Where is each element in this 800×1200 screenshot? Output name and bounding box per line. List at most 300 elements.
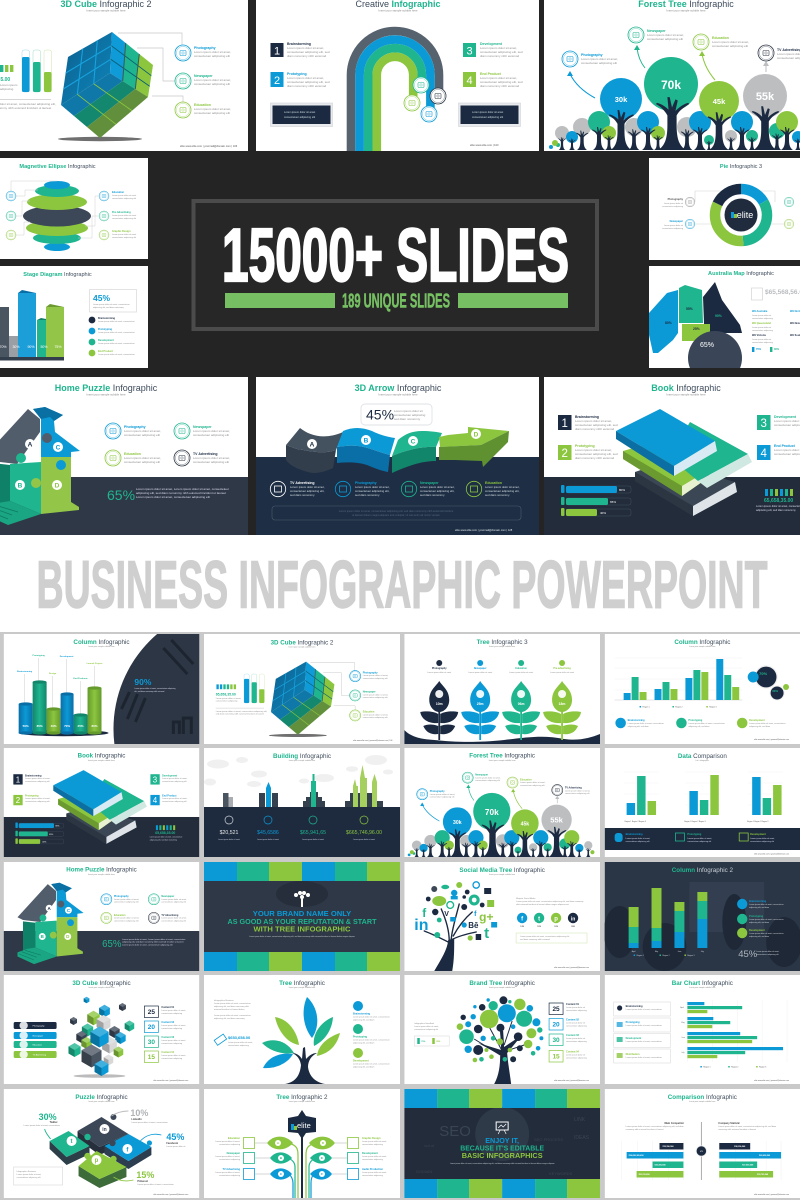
list A-D: Brainstorming (98, 317, 116, 320)
percent boxes: consectetuer adipiscing (566, 1040, 587, 1043)
slide: Forest Tree Infographic (top): Photography (581, 53, 603, 57)
slide: 3D Cube Infographic 2 (top): Newspaper (194, 74, 213, 78)
column chart (624, 659, 739, 700)
share stats: 12M (537, 926, 541, 928)
people figure (150, 825, 183, 841)
headline: ENJOY IT, (485, 1136, 519, 1145)
thumbnail: 3D Cube Infographic: Insert your sample subtitle here (88, 986, 115, 989)
horizontal bars: April (680, 1006, 684, 1009)
slide: Magnetive Ellipse Infographic: consectetuer adipiscing elit (112, 197, 136, 200)
45% box: Lorem ipsum dolor sit amet, consectetuer (93, 303, 130, 306)
thumbnail: 3D Cube Infographic 2: Lorem ipsum dolor sit amet, (363, 693, 389, 696)
slide: Magnetive Ellipse Infographic: Lorem ipsum dolor sit amet (112, 214, 137, 217)
leaves (262, 997, 340, 1068)
cylinder labels: Design (49, 673, 57, 675)
title: Tree Infographic (279, 980, 325, 987)
percent boxes: Content 03 (161, 1036, 175, 1039)
slide: Forest Tree Infographic (top): Lorem ipsum dolor sit amet, (581, 57, 618, 61)
outlined note (516, 933, 587, 943)
title: Book Infographic (651, 383, 721, 393)
cylinder chart: 85% (37, 724, 43, 728)
thumbnail: Tree Infographic 3 (404, 634, 600, 744)
progress bars (561, 485, 631, 516)
column headings: Lorem ipsum dolor sit amet, consectetuer adipiscing elit, sed diam (626, 1125, 684, 1128)
title: Column Infographic 2 (672, 867, 733, 874)
45% box: adipiscing elit, sed diam nonummy (93, 306, 124, 309)
numbered boxes: diam nonummy nibh euismod (575, 456, 615, 460)
values: 70k (661, 78, 681, 92)
callout labels: Twitter (50, 1121, 58, 1124)
thumbnail: Tree Infographic 3: 25m (477, 702, 484, 706)
dark panel labels: Lorem ipsum dolor sit amet, (290, 485, 325, 489)
slide: 3D Cube Infographic 2 (top): Lorem ipsum dolor sit amet, (194, 78, 231, 82)
title: Comparison Infographic (668, 1094, 737, 1101)
progress bars (15, 823, 64, 844)
cylinder chart: 80% (92, 724, 98, 728)
headline (228, 909, 377, 934)
arrow segment D (439, 427, 509, 467)
title: Building Infographic (273, 753, 331, 760)
percent boxes: consectetuer adipiscing (161, 1027, 182, 1030)
thumbnail: Data Comparison (604, 748, 800, 857)
legend row: Region 1 Region 2 Region 3 (684, 821, 706, 823)
arrow segment D: D (474, 432, 479, 438)
right bars: $65,658,565 (759, 1155, 771, 1157)
share stats: 12M (554, 926, 558, 928)
slide: Home Puzzle Infographic (top) (0, 377, 248, 535)
right labels: Lorem ipsum dolor sit amet, (362, 1155, 387, 1158)
state list: consectetuer adipiscing (752, 341, 773, 344)
horizontal bars (680, 1000, 787, 1062)
thumbnail: 3D Cube Infographic 2: Photography (363, 671, 378, 674)
dark panel labels: Newspaper (420, 481, 439, 485)
captions: Lorem ipsum dolor sit amet (218, 838, 240, 841)
list boxes: Lorem ipsum dolor sit amet, consectetuer (626, 1008, 662, 1011)
icons and labels (350, 671, 361, 682)
headline (460, 1136, 544, 1160)
percent callouts (39, 1108, 184, 1180)
slide: Forest Tree Infographic (top): Insert your sample subtitle here (666, 8, 706, 12)
numbered boxes: diam nonummy nibh euismod (575, 427, 615, 431)
dark panel labels: consectetuer adipiscing elit, (355, 489, 390, 493)
leaves: A (277, 1141, 280, 1145)
green bars (225, 293, 335, 308)
map states (649, 282, 742, 385)
dark panel labels (290, 481, 520, 497)
thumbnail: Tree Infographic 3: Lorem ipsum dolor sit amet (550, 671, 574, 674)
leaves (267, 1137, 335, 1180)
percent boxes: Content 01 (161, 1006, 175, 1009)
thumbnail: Home Puzzle Infographic: A (48, 906, 52, 911)
numbered boxes: Lorem ipsum dolor sit amet, (575, 448, 612, 452)
title: Home Puzzle Infographic (55, 383, 158, 393)
45% statistic: Lorem ipsum dolor sit amet, (756, 950, 780, 953)
house art (17, 883, 84, 964)
thumbnail: Tree Infographic 3: Insert your sample subtitle here (489, 645, 515, 648)
cylinder labels: Brainstorming (17, 670, 33, 673)
slide: 3D Cube Infographic 2 (top): consectetuer adipiscing elit (194, 111, 230, 115)
step 1: Lorem ipsum dolor sit amet, (287, 46, 324, 50)
left copy: euismod tincidunt ut laoreet dolore (214, 1008, 245, 1011)
callout labels (24, 1118, 186, 1186)
percent boxes: Content 01 (566, 1003, 579, 1006)
captions: Lorem ipsum dolor sit amet (302, 838, 324, 841)
numbered boxes: consectetuer adipiscing elit (25, 780, 50, 783)
values: 55k (550, 816, 564, 825)
map states: 55% (686, 307, 693, 311)
intro copy: nibh euismod tincidunt ut laoreet dolore magna aliquam erat (516, 903, 569, 906)
progress bars: 40% (600, 511, 606, 515)
list boxes: Prototyping (626, 1021, 640, 1024)
legend (634, 954, 695, 957)
chalk sketches: LINK (574, 1117, 586, 1123)
numbered boxes: 1 (561, 418, 568, 430)
thumbnail: Forest Tree Infographic: Lorem ipsum dolor sit amet, (520, 781, 546, 784)
left bars: $56,658,365,658 (629, 1155, 644, 1157)
dark panel labels: Lorem ipsum dolor sit amet, (485, 485, 520, 489)
spotlight (475, 1107, 529, 1161)
90% statistic: 90% (134, 677, 152, 687)
left bars: $35,356,568 (662, 1146, 674, 1148)
state list: consectetuer adipiscing (752, 317, 773, 320)
thumbnail: Data Comparison: Let's infographic (696, 759, 709, 762)
puzzle pieces: t (71, 1139, 73, 1145)
thumbnail: Tree Infographic 3: 10m (436, 702, 443, 706)
step 4 (463, 72, 523, 88)
callout labels: Lorem ipsum dolor sit amet, consectetuer (137, 1183, 174, 1186)
left copy (214, 1000, 251, 1020)
people stats (752, 347, 780, 352)
gender box: 70% (421, 1041, 425, 1043)
thumbnail: Bar Chart Infographic (604, 975, 800, 1084)
list A-D: Lorem ipsum dolor sit amet, consectetuer (98, 342, 135, 345)
chalk sketches: SEO (439, 1123, 471, 1140)
gender box (414, 1036, 449, 1046)
footer: elite www.elite.com | yourmail@domain.com | 128 (455, 528, 513, 532)
dark top background (0, 0, 800, 535)
dark info band: consectetuer adipiscing elit (750, 840, 774, 843)
numbered boxes: consectetuer adipiscing elit (162, 780, 187, 783)
step 1: Brainstorming (287, 42, 311, 46)
top markers (436, 660, 565, 666)
chalk sketches: KEYWORDS (549, 1171, 573, 1176)
legend row: Region 1 Region 2 Region 3 (747, 821, 768, 823)
people figure: 65,658,35.00 (764, 498, 793, 504)
tree trunk and branches (474, 1021, 530, 1084)
step 4: End Product (480, 72, 502, 76)
callout labels: Facebook (166, 1142, 179, 1145)
right items: Lorem ipsum dolor sit amet, consectetuer (353, 1062, 390, 1066)
leaves: E (321, 1156, 323, 1160)
captions: Lorem ipsum dolor sit amet (257, 838, 279, 841)
share stats: in (571, 916, 575, 923)
thumbnail: 3D Cube Infographic 2: consectetuer adipiscing elit (363, 696, 388, 699)
list pills: Education (33, 1043, 43, 1046)
social symbols (414, 906, 494, 942)
pie icons (685, 197, 695, 207)
map states: 25% (693, 327, 700, 331)
chalk sketches: SEO PROCESS (534, 1137, 563, 1142)
legend: Region 1 (637, 955, 644, 957)
plants (420, 681, 458, 740)
legend: Region 3 (687, 955, 695, 957)
leaves: F (321, 1172, 323, 1176)
dark outlined note: Lorem ipsum dolor sit amet, consectetuer adipiscing elit, sed diam nonummy nibh euismod tincidunt (339, 509, 454, 513)
thumbnail: 3D Cube Infographic 2 (204, 634, 400, 744)
dark panel labels: TV Advertising (290, 481, 315, 485)
trunk (285, 1047, 325, 1084)
percent boxes: 15 (148, 1054, 155, 1061)
percent boxes: Lorem ipsum dolor sit amet, (161, 1039, 186, 1042)
share stats: t (538, 916, 540, 923)
numbered boxes: Lorem ipsum dolor sit amet, (162, 777, 188, 780)
right items: Lorem ipsum dolor sit amet, consectetuer (353, 1038, 390, 1042)
step 1 (270, 42, 330, 58)
right items: Lorem ipsum dolor sit amet, consectetuer (353, 1016, 390, 1018)
thumbnail: Forest Tree Infographic: Education (520, 778, 532, 781)
values: $665,746,96.00 (346, 830, 382, 836)
slide: 3D Arrow Infographic (256, 377, 539, 535)
social symbols: Bē (468, 921, 479, 930)
progress tubes (22, 50, 52, 92)
thumbnail: Tree Infographic 3: 18m (559, 702, 565, 706)
intro copy (516, 897, 583, 906)
thumbnail: Tree Infographic: Insert your sample subtitle here (289, 986, 315, 989)
arrow segment B: B (364, 438, 369, 444)
thumbnail: Building Infographic (204, 748, 400, 857)
stacked bars: June (677, 951, 681, 953)
dark band (256, 457, 539, 535)
numbered boxes: Brainstorming (25, 774, 42, 777)
slide: Forest Tree Infographic (top): Lorem ipsum dolor sit amet, (712, 40, 749, 44)
dark callouts: Lorem ipsum dolor sit amet (284, 110, 316, 114)
footer: elite www.elite.com | yourmail@domain.com (754, 1193, 789, 1196)
colour stripes (404, 1089, 600, 1198)
social symbols: V (444, 911, 449, 918)
dark panel labels: consectetuer adipiscing elit, (420, 489, 455, 493)
forest art (549, 45, 800, 150)
legend: Region 3 (709, 706, 716, 709)
thumbnail: Forest Tree Infographic: Newspaper (475, 774, 488, 777)
slide: Home Puzzle Infographic (top): adipiscing elit, sed diam nonummy nibh euismod tincidunt ut laoreet (136, 491, 226, 495)
logo sign (288, 1110, 316, 1139)
65% statistic: 65% (107, 487, 135, 503)
dark panel icons (270, 481, 482, 497)
labels: Education (515, 667, 527, 670)
headline: YOUR BRAND NAME ONLY (253, 909, 351, 918)
thumbnail: Puzzle Infographic (4, 1089, 200, 1198)
title: Home Puzzle Infographic (66, 867, 137, 874)
step 2: Prototyping (287, 72, 307, 76)
right bars (719, 1143, 781, 1178)
horizontal bars: May (681, 1022, 685, 1024)
circle stats: 70% (759, 671, 768, 676)
state list: WA New (790, 322, 800, 325)
arrow segment A (286, 428, 343, 473)
chalk sketches: IDEAS (574, 1135, 590, 1141)
slide: Forest Tree Infographic (top): Education (712, 36, 729, 40)
slide: Book Infographic (top) (544, 377, 800, 535)
numbered boxes: Brainstorming (575, 415, 599, 419)
money stat: $653,658.00 (228, 1035, 251, 1040)
statistic (0, 65, 56, 110)
labels: Lorem ipsum dolor sit amet, (215, 1171, 240, 1174)
donut centre logo (724, 198, 758, 232)
statistic: adipiscing (0, 87, 14, 91)
values: $45,6586 (257, 830, 279, 836)
dark panel labels: consectetuer adipiscing elit, (290, 489, 325, 493)
thumbnail: Tree Infographic 3: Lorem ipsum dolor sit amet (427, 671, 452, 674)
note box: Infographics Business (17, 1170, 36, 1173)
list boxes (614, 1002, 670, 1063)
step 1: consectetuer adipiscing elit, sed (287, 50, 330, 54)
cylinder labels: Launch Project (87, 662, 103, 665)
slide: Home Puzzle Infographic (top): consectetuer adipiscing elit (193, 460, 229, 464)
right items: adipiscing elit, sed diam (353, 1066, 375, 1068)
share stats: p (554, 916, 558, 923)
title: Australia Map Infographic (708, 271, 774, 277)
numbered boxes: consectetuer adipiscing elit (162, 800, 187, 803)
dark panel labels: Education (485, 481, 502, 485)
white middle band (0, 535, 800, 632)
footer: elite www.elite.com | 103 (470, 143, 499, 147)
slide: Pie Infographic 3: Newspaper (670, 220, 683, 223)
social blobs (426, 882, 497, 941)
state list: Lorem ipsum dolor sit (752, 326, 772, 329)
progress bars: 65% (49, 834, 53, 836)
book stack (53, 770, 147, 844)
numbered boxes: Prototyping (575, 444, 595, 448)
right labels: Audio Production (362, 1168, 383, 1171)
list pills: Newspaper (33, 1034, 43, 1037)
right labels: consectetuer adipiscing (362, 1158, 383, 1161)
percent boxes: consectetuer adipiscing (566, 1056, 587, 1060)
slide: Home Puzzle Infographic (top): Education (124, 452, 141, 456)
logo sign: elite (297, 1121, 311, 1130)
dark panel labels: sed diam nonummy. (290, 493, 315, 497)
thumbnail: Home Puzzle Infographic: consectetuer adipiscing elit (161, 901, 186, 904)
dark info band: consectetuer adipiscing elit (626, 840, 650, 843)
thumbnail: Home Puzzle Infographic: consectetuer adipiscing elit (114, 901, 139, 904)
slide: Magnetive Ellipse Infographic: Lorem ipsum dolor sit amet (112, 194, 137, 197)
presentation icon (496, 1122, 508, 1134)
callout labels: Pinterest (137, 1180, 148, 1183)
right bars: $37,565,568 (742, 1164, 754, 1167)
thumbnail: Social Media Tree Infographic: Insert your sample subtitle here (489, 873, 515, 876)
list A-D: Lorem ipsum dolor sit amet, consectetuer (98, 320, 135, 323)
step 4: 4 (466, 75, 473, 87)
slide: Forest Tree Infographic (top): Newspaper (647, 29, 666, 33)
percent boxes: Lorem ipsum dolor sit (566, 1053, 585, 1057)
slide: Magnetive Ellipse Infographic: consectetuer adipiscing elit (112, 236, 136, 239)
column headings: nonummy nibh euismod tincidunt ut laoreet (626, 1128, 664, 1131)
percent boxes: Lorem ipsum dolor sit (566, 1006, 585, 1009)
thumbnail: Brand Name banner (204, 862, 400, 971)
column headings: Lorem ipsum dolor sit amet, consectetuer adipiscing elit, sed diam (718, 1125, 777, 1128)
labels: consectetuer adipiscing (219, 1174, 240, 1177)
percent boxes: 20 (552, 1021, 560, 1029)
numbered boxes: 2 (16, 796, 20, 805)
bottom items: adipiscing elit, sed diam (628, 725, 649, 728)
right labels: Graphic Design (362, 1137, 381, 1140)
bottom items: Lorem ipsum dolor sit amet, consectetuer (688, 722, 725, 725)
slide: Home Puzzle Infographic (top): Newspaper (193, 425, 212, 429)
arrow segment C: C (411, 438, 416, 446)
people figure: adipiscing elit, sed diam nonummy (756, 508, 796, 512)
title: Brand Tree Infographic (469, 980, 535, 987)
slide: Home Puzzle Infographic (top): Lorem ipsum dolor sit amet, (124, 429, 161, 433)
percent boxes: 30 (148, 1039, 155, 1046)
thumbnail: 3D Cube Infographic 2: Lorem ipsum dolor sit amet, (363, 674, 389, 677)
chalk sketches: out of (424, 1143, 435, 1148)
slide: 3D Cube Infographic 2 (top): Photography (194, 46, 216, 50)
thumbnail: Home Puzzle Infographic: Lorem ipsum dolor sit amet, consectetuer adipiscing elit (122, 943, 173, 946)
bottom items: Prototyping (688, 719, 703, 722)
dark info band: Development (750, 833, 766, 836)
slide: Home Puzzle Infographic (top): consectetuer adipiscing elit (193, 433, 229, 437)
step 1: diam nonummy nibh euismod (287, 54, 327, 58)
slide: Home Puzzle Infographic (top): TV Advertising (193, 452, 218, 456)
social symbols: g+ (479, 910, 494, 924)
ground (404, 730, 600, 744)
dark info band: Lorem ipsum dolor sit amet, (750, 837, 775, 840)
values: 45k (713, 97, 726, 106)
thumbnail: Home Puzzle Infographic: B (41, 934, 45, 939)
cylinder chart: 50% (23, 724, 29, 728)
percent boxes: 20 (148, 1024, 155, 1031)
step 3: 3 (466, 46, 473, 58)
right labels: Lorem ipsum dolor sit amet, (362, 1140, 387, 1143)
labels (215, 1137, 240, 1177)
people stats: 70% (756, 348, 762, 351)
progress bars: 40% (42, 842, 47, 844)
column headings: Company Statistic (718, 1122, 741, 1125)
left copy: Infographics Business (214, 1000, 234, 1002)
dark info band: Lorem ipsum dolor sit amet, (687, 837, 712, 840)
arrow segment A: A (310, 442, 315, 448)
state list: Lorem ipsum dolor sit (752, 314, 772, 317)
percent boxes: 30 (552, 1037, 560, 1044)
right items (353, 1001, 390, 1068)
rainbow arch (351, 31, 439, 151)
social symbols: f (422, 906, 427, 920)
percent boxes: Lorem ipsum dolor sit amet, (161, 1024, 186, 1027)
numbered boxes: 4 (760, 448, 767, 460)
thumbnail: Tree Infographic 2 (204, 1089, 400, 1198)
thumbnail: 3D Cube Infographic 2: consectetuer adipiscing elit (363, 716, 388, 719)
dark panel labels: consectetuer adipiscing elit, (485, 489, 520, 493)
cylinder chart (19, 658, 108, 736)
list A-D (89, 317, 135, 356)
slide: Forest Tree Infographic (top): Lorem ipsum dolor sit amet, (647, 33, 684, 37)
percent callouts: 30% (39, 1112, 57, 1122)
numbered boxes: consectetuer adipiscing elit, sed (575, 423, 618, 427)
cylinder labels: Development (60, 655, 74, 658)
thumbnail: Column Infographic: Column Infographic (73, 639, 130, 646)
icons and labels (417, 789, 428, 800)
thumbnail: Tree Infographic (204, 975, 400, 1084)
list boxes: Lorem ipsum dolor sit amet, consectetuer (626, 1040, 662, 1043)
percent boxes: Lorem ipsum dolor sit amet, (161, 1054, 186, 1057)
icons and labels (562, 51, 578, 67)
45% statistic (738, 949, 780, 960)
percent boxes: Lorem ipsum dolor sit (566, 1021, 585, 1025)
thumbnail: Book Infographic: Insert your sample subtitle here (88, 759, 115, 762)
tree circles (457, 996, 543, 1062)
thumbnail: Forest Tree Infographic: consectetuer adipiscing elit (520, 784, 545, 787)
right items: Brainstorming (749, 900, 767, 903)
title: Stage Diagram Infographic (23, 272, 92, 278)
